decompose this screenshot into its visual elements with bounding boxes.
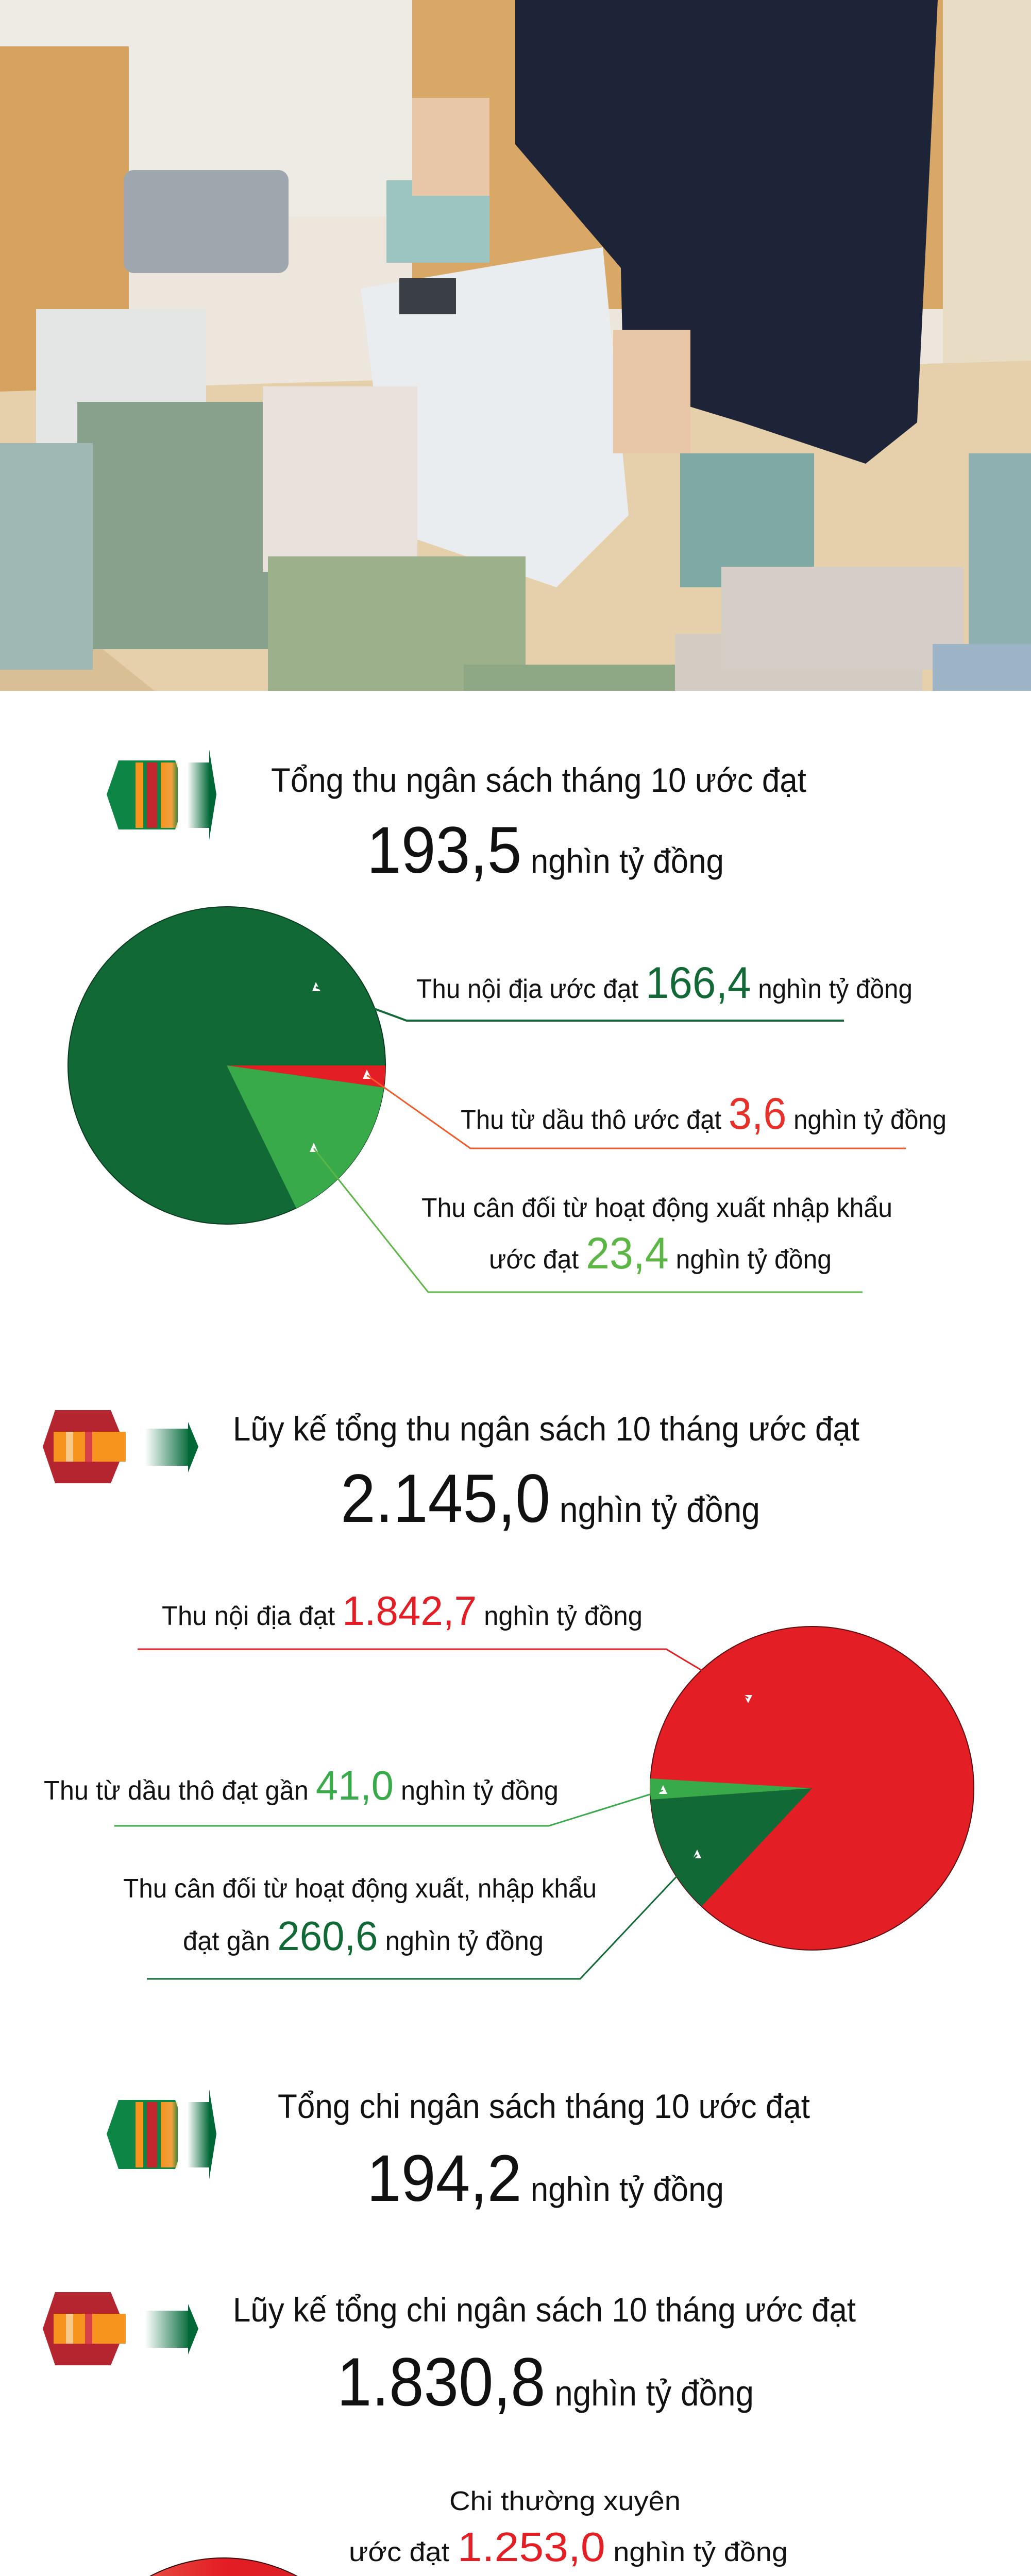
callout: xuat nhap khau: ước đạt 23,4 nghìn tỷ đồng xyxy=(489,1229,832,1278)
pie chart: thu thang 10 xyxy=(68,907,385,1224)
callout: xuat nhap khau luy ke: Thu cân đối từ hoạt động xuất, nhập khẩu xyxy=(123,1874,597,1904)
title: Tổng thu tháng 10: Tổng thu ngân sách tháng 10 ước đạt xyxy=(271,761,806,799)
icon: section 4 red marker xyxy=(43,2292,198,2365)
title: Lũy kế tổng chi: Lũy kế tổng chi ngân sách 10 tháng ước đạt xyxy=(233,2291,856,2329)
title: Tổng chi tháng 10: Tổng chi ngân sách tháng 10 ước đạt xyxy=(278,2087,810,2125)
callout: dau tho luy ke xyxy=(44,1762,663,1826)
photo: money counting xyxy=(0,0,1031,691)
callout: chi thuong xuyen: Chi thường xuyên xyxy=(449,2486,681,2516)
callout: chi thuong xuyen xyxy=(268,2486,788,2576)
value: 193,5: 193,5 nghìn tỷ đồng xyxy=(367,814,724,887)
callout: dau tho luy ke: Thu từ dầu thô đạt gần 41,0 nghìn tỷ đồng xyxy=(44,1762,559,1808)
value: 2.145,0: 2.145,0 nghìn tỷ đồng xyxy=(341,1461,760,1537)
callout: chi thuong xuyen: ước đạt 1.253,0 nghìn tỷ đồng xyxy=(349,2524,788,2570)
callout: xuat nhap khau xyxy=(314,1148,892,1292)
callout: xuat nhap khau: Thu cân đối từ hoạt động xuất nhập khẩu xyxy=(421,1193,892,1223)
callout: xuat nhap khau luy ke xyxy=(123,1855,697,1979)
callout: thu noi dia luy ke xyxy=(138,1588,748,1698)
icon: section 1 green marker xyxy=(107,750,216,840)
callout: xuat nhap khau luy ke: đạt gần 260,6 nghìn tỷ đồng xyxy=(183,1913,544,1959)
callout: dau tho: Thu từ dầu thô ước đạt 3,6 nghìn tỷ đồng xyxy=(461,1089,947,1139)
value: 1.830,8: 1.830,8 nghìn tỷ đồng xyxy=(337,2344,754,2420)
callout: thu noi dia xyxy=(316,958,912,1021)
icon: section 3 green marker xyxy=(107,2089,216,2179)
value: 194,2: 194,2 nghìn tỷ đồng xyxy=(367,2142,724,2215)
title: Lũy kế tổng thu: Lũy kế tổng thu ngân sách 10 tháng ước đạt xyxy=(233,1410,859,1448)
callout: thu noi dia luy ke: Thu nội địa đạt 1.842,7 nghìn tỷ đồng xyxy=(162,1588,643,1634)
callout: dau tho xyxy=(367,1075,947,1148)
callout: thu noi dia: Thu nội địa ước đạt 166,4 nghìn tỷ đồng xyxy=(416,958,912,1008)
pie chart: luy ke thu xyxy=(650,1626,974,1950)
pie chart: luy ke chi xyxy=(67,2558,380,2576)
icon: section 2 red marker xyxy=(43,1410,198,1483)
